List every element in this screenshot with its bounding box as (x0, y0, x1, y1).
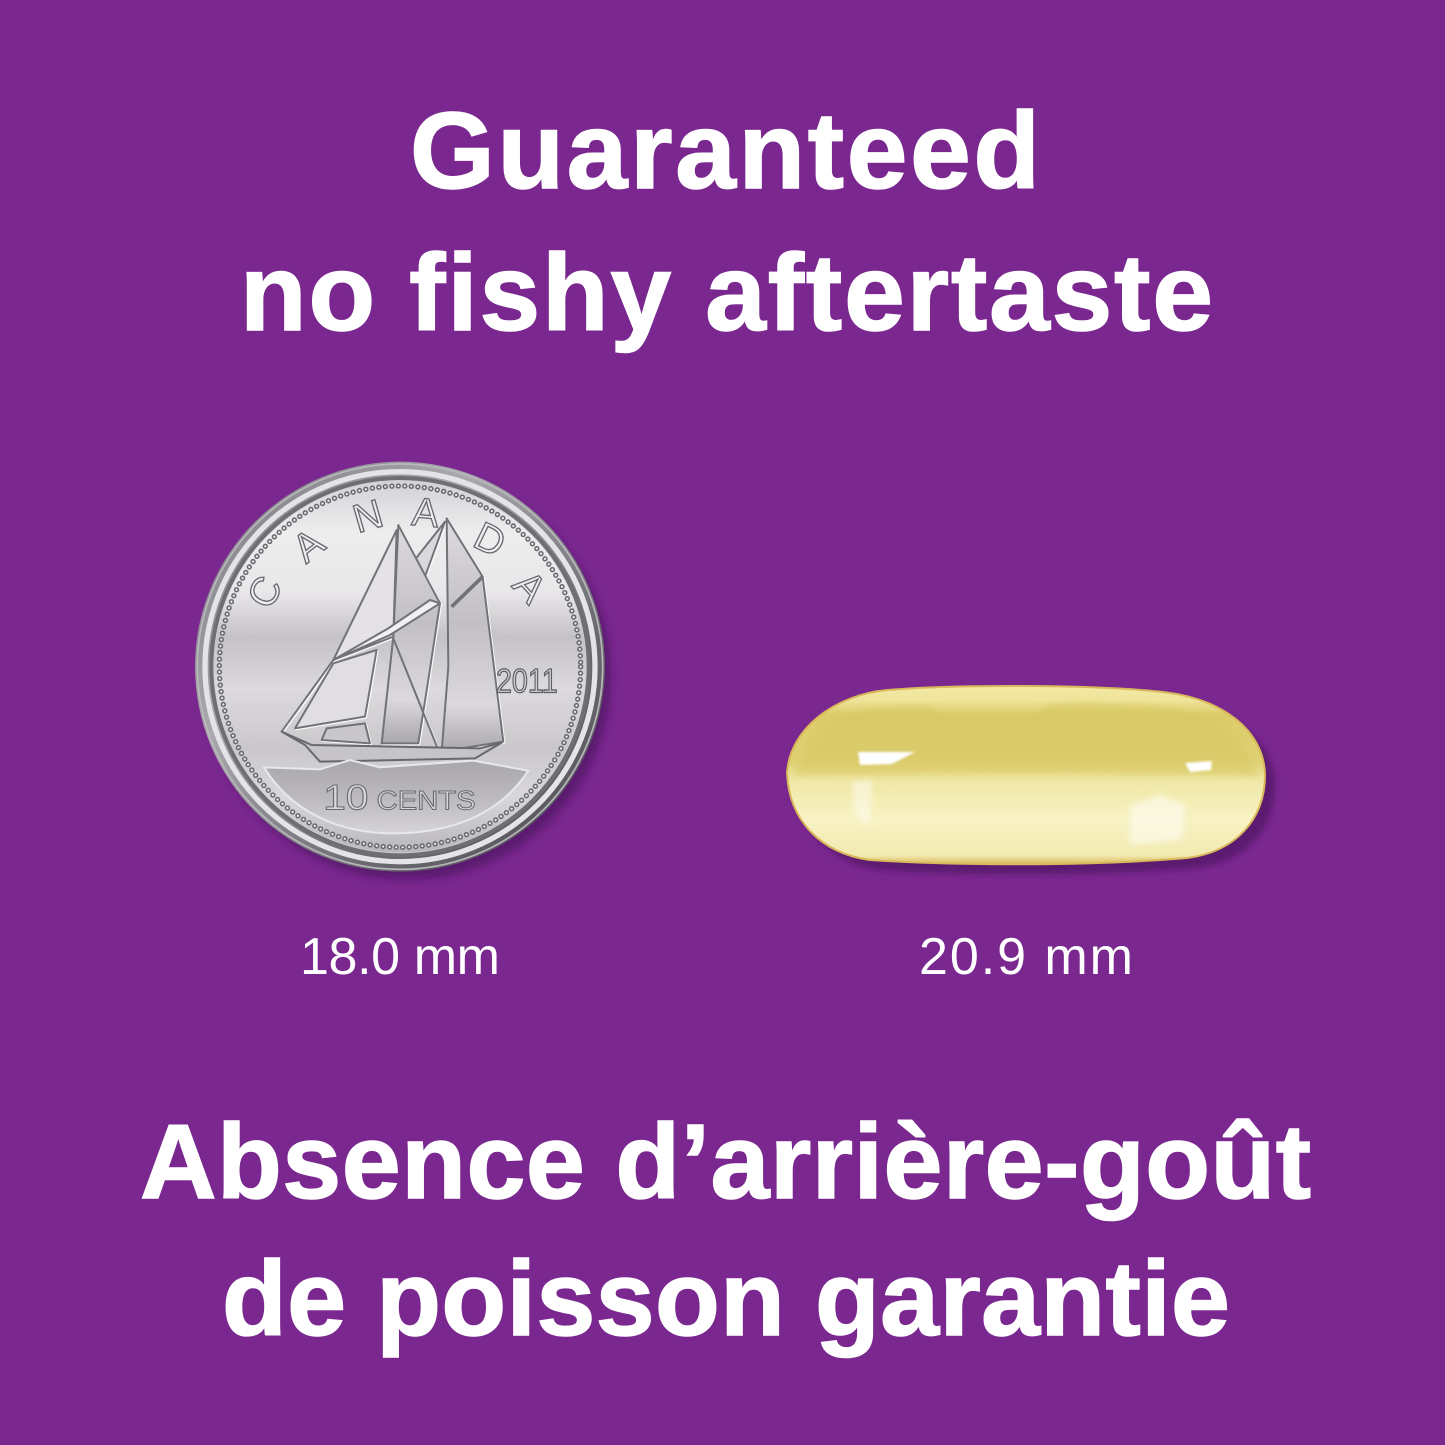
english heading (240, 90, 1213, 354)
coin lettering CANADA: A (504, 562, 555, 612)
beaded edge (219, 486, 581, 847)
coin shadow (203, 472, 611, 880)
french heading: Absence d’arrière-goût (140, 1103, 1311, 1221)
french heading (140, 1103, 1311, 1358)
capsule inner tint (796, 703, 1256, 775)
capsule body (787, 686, 1265, 864)
coin lettering CANADA: N (348, 492, 388, 542)
sea and waves (264, 760, 528, 833)
denomination 10: 10 (323, 778, 368, 817)
capsule size label: 20.9 mm (919, 928, 1133, 986)
coin lettering CANADA: C (239, 569, 291, 615)
coin lettering CANADA (239, 490, 555, 615)
coin size label: 18.0 mm (300, 928, 500, 986)
softgel capsule (787, 686, 1275, 874)
capsule glints (852, 752, 1212, 845)
schooner sails (282, 518, 503, 752)
french heading: de poisson garantie (222, 1240, 1230, 1358)
coin lettering CANADA: D (467, 514, 512, 566)
english heading: no fishy aftertaste (240, 232, 1213, 354)
coin rim (195, 462, 605, 872)
coin: Canadian ten cent piece (195, 462, 611, 880)
coin face (214, 481, 586, 853)
year 2011: 2011 (496, 662, 558, 700)
schooner hull (282, 732, 502, 762)
capsule shadow (797, 696, 1275, 874)
coin lettering CANADA: A (285, 520, 333, 571)
denomination CENTS: CENTS (377, 785, 476, 815)
coin lettering CANADA: A (410, 490, 441, 536)
english heading: Guaranteed (410, 90, 1040, 212)
